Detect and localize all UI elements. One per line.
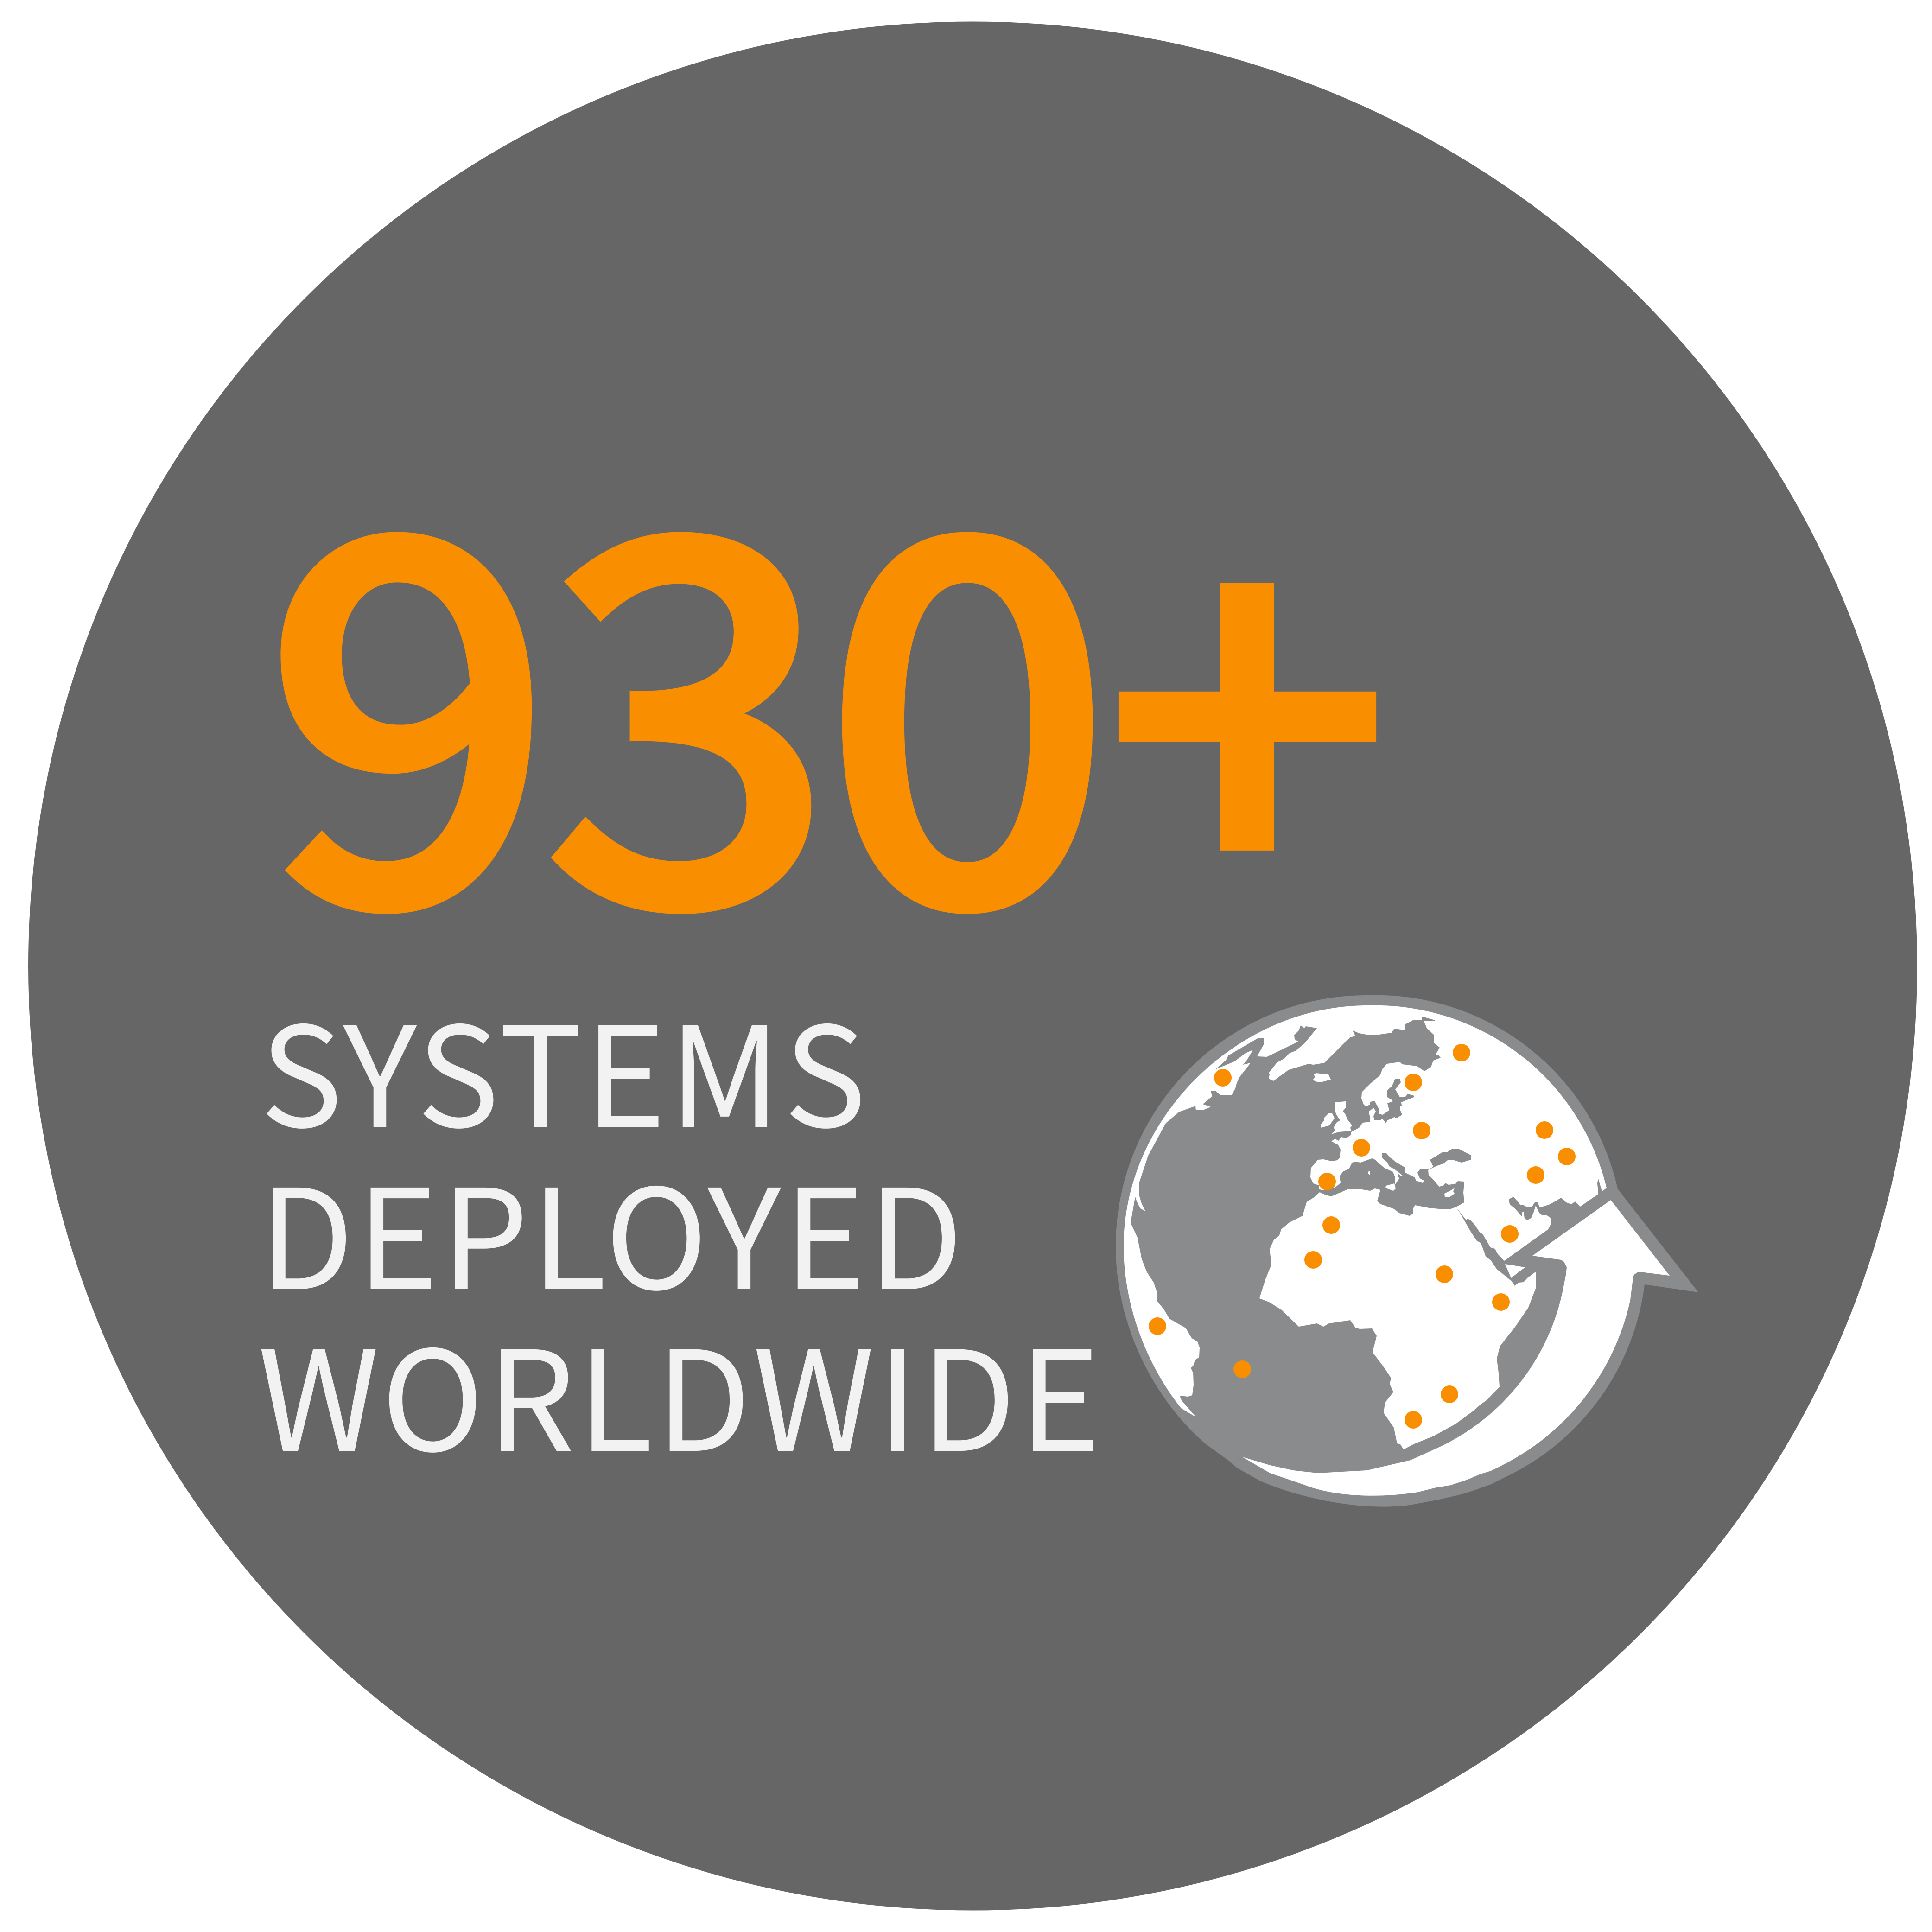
globe and arrow silhouette xyxy=(1116,995,1698,1507)
headline number: 930+: + xyxy=(1108,324,1386,1043)
headline number: 930+: 930 xyxy=(267,341,1109,1039)
location dots xyxy=(1149,1044,1576,1429)
caption: systems deployed worldwide xyxy=(258,966,1100,1491)
caption: systems deployed worldwide: DEPLOYED xyxy=(259,1129,963,1329)
caption: systems deployed worldwide: WORLDWIDE xyxy=(258,1290,1100,1491)
arrow: white swoosh around the globe xyxy=(1242,1200,1670,1496)
caption: systems deployed worldwide: SYSTEMS xyxy=(260,966,866,1167)
land: Eurasia, Greenland and the Americas xyxy=(1124,1005,1607,1417)
icon: globe with circular arrow and location dots xyxy=(1116,995,1698,1507)
land: Horn of Africa fragment xyxy=(1505,1264,1525,1278)
land: islands of the North Atlantic and Mediterranean xyxy=(1313,1073,1455,1197)
land: Africa xyxy=(1259,1188,1536,1449)
